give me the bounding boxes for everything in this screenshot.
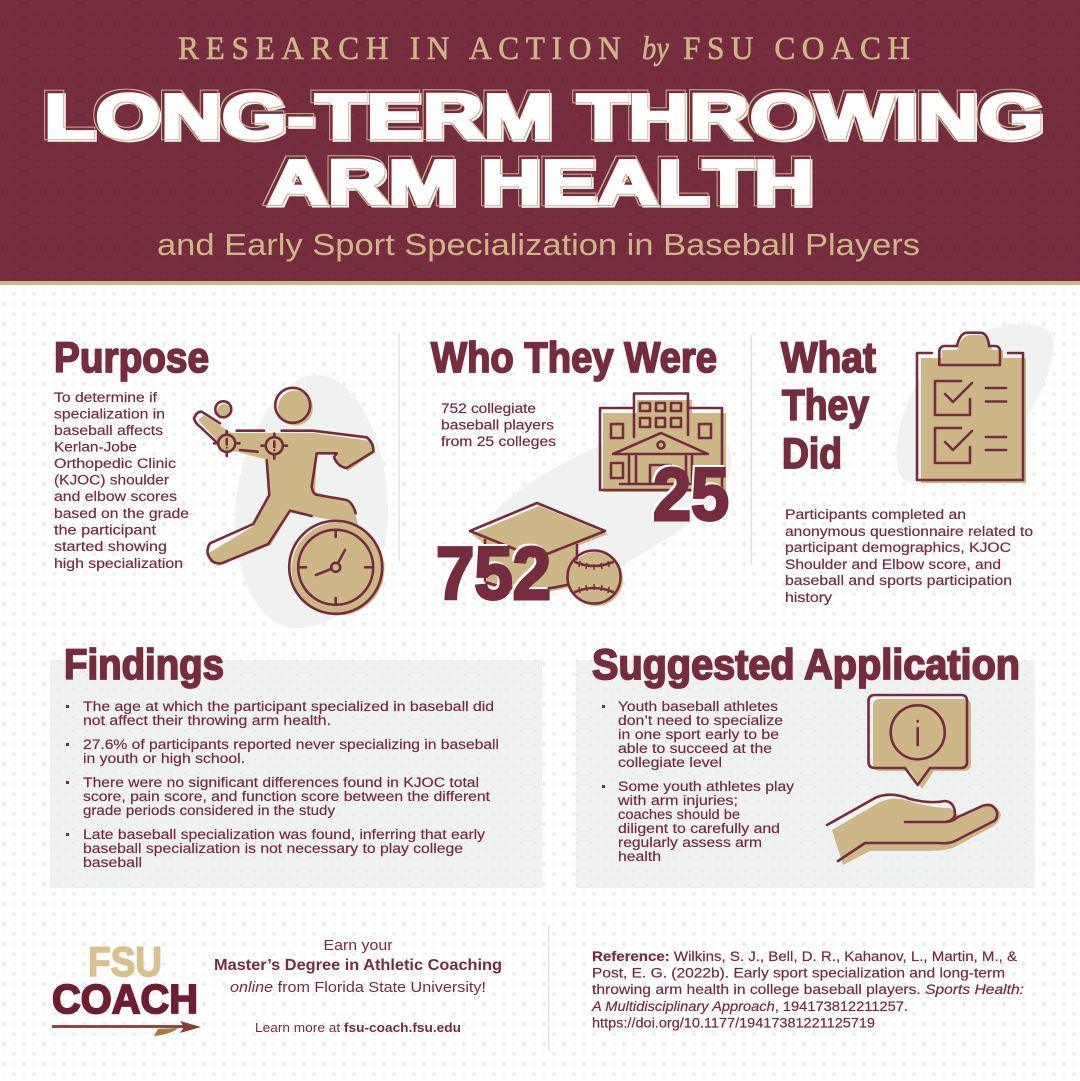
subtitle: and Early Sport Specialization in Baseball Players xyxy=(157,227,920,262)
heading: findings: Findings xyxy=(64,641,224,689)
purpose text: and elbow scores xyxy=(54,489,177,505)
title: LONG-TERM THROWING xyxy=(44,80,1044,152)
findings list: not affect their throwing arm health. xyxy=(83,713,331,729)
who they were text: 752 collegiate xyxy=(441,401,536,417)
what they did text: baseball and sports participation xyxy=(785,573,1012,589)
panel: purpose xyxy=(54,334,388,628)
application list: coaches should be xyxy=(618,807,740,823)
logo: FSU Coach xyxy=(52,938,201,1036)
purpose text: To determine if xyxy=(54,390,157,406)
findings list: 27.6% of participants reported never specializing in baseball xyxy=(83,737,499,753)
heading: purpose: Purpose xyxy=(54,334,209,382)
logo: FSU Coach: FSU xyxy=(88,938,162,985)
purpose text: (KJOC) shoulder xyxy=(54,472,169,488)
purpose text: specialization in xyxy=(54,406,165,422)
logo: FSU Coach: COACH xyxy=(52,976,198,1022)
findings list: score, pain score, and function score between the different xyxy=(83,789,490,805)
icon: info bubble over open hand xyxy=(827,695,1001,865)
purpose text: started showing xyxy=(54,539,167,555)
heading: what they did: What xyxy=(781,334,876,382)
icon: baseball xyxy=(568,550,623,606)
promo text xyxy=(214,938,502,1035)
reference: https://doi.org/10.1177/19417381221125719 xyxy=(592,1016,875,1032)
what they did text: history xyxy=(785,590,833,606)
purpose text: based on the grade xyxy=(54,506,189,522)
reference: Reference: Wilkins, S. J., Bell, D. R., Kahanov, L., Martin, M., & xyxy=(592,949,1018,965)
promo text: Learn more at fsu-coach.fsu.edu xyxy=(255,1020,461,1035)
reference xyxy=(591,949,1024,1032)
purpose text: baseball affects xyxy=(54,423,163,439)
reference: Post, E. G. (2022b). Early sport specialization and long-term xyxy=(592,966,1005,982)
what they did text: Participants completed an xyxy=(785,507,966,523)
findings list: There were no significant differences found in KJOC total xyxy=(83,775,479,791)
icon: clipboard checklist xyxy=(917,333,1026,483)
header banner xyxy=(0,0,1080,285)
purpose text: high specialization xyxy=(54,556,183,572)
application list: Some youth athletes play xyxy=(618,779,795,795)
application list: able to succeed at the xyxy=(618,741,772,757)
reference: throwing arm health in college baseball players. Sports Health: xyxy=(592,982,1024,998)
promo text: Master’s Degree in Athletic Coaching xyxy=(214,957,502,974)
findings list: baseball specialization is not necessary to play college xyxy=(83,841,463,857)
application list: health xyxy=(618,849,661,865)
number: 752 players: 752 xyxy=(436,532,551,615)
eyebrow: research in action xyxy=(178,29,910,67)
heading: what they did: They xyxy=(782,382,869,430)
application list: don’t need to specialize xyxy=(618,713,783,729)
findings list: grade periods considered in the study xyxy=(83,803,336,819)
promo text: online from Florida State University! xyxy=(230,980,486,996)
eyebrow: research in action: by xyxy=(642,31,669,67)
heading: suggested application: Suggested Application xyxy=(592,641,1020,689)
heading: who they were: Who They Were xyxy=(431,334,717,382)
purpose text: Kerlan-Jobe xyxy=(54,440,137,456)
panel: what they did xyxy=(781,324,1053,606)
reference: A Multidisciplinary Approach , 194173812211257. xyxy=(591,999,908,1015)
what they did text: anonymous questionnaire related to xyxy=(785,524,1033,540)
what they did text: participant demographics, KJOC xyxy=(785,540,1011,556)
purpose text xyxy=(54,390,189,572)
application list: regularly assess arm xyxy=(618,835,762,851)
who they were text: from 25 colleges xyxy=(441,434,556,450)
findings list: baseball xyxy=(83,855,142,871)
number: 25 colleges: 25 xyxy=(653,453,729,536)
eyebrow: research in action: RESEARCH IN ACTION xyxy=(178,29,621,66)
background blob xyxy=(897,324,1053,485)
panel: who they were xyxy=(431,334,731,615)
findings list: Late baseball specialization was found, inferring that early xyxy=(83,827,486,843)
who they were text xyxy=(441,401,556,450)
who they were text: baseball players xyxy=(441,418,554,434)
application list: in one sport early to be xyxy=(618,727,779,743)
heading: what they did xyxy=(781,334,876,478)
icon: injured pitcher with clock xyxy=(194,375,388,628)
title xyxy=(44,80,1044,218)
background blob xyxy=(488,424,731,581)
application list xyxy=(602,699,795,865)
what they did text xyxy=(785,507,1033,606)
findings list xyxy=(66,699,499,871)
findings list: The age at which the participant specialized in baseball did xyxy=(83,699,494,715)
icon: college building xyxy=(600,394,726,492)
application list: Youth baseball athletes xyxy=(618,699,778,715)
title: ARM HEALTH xyxy=(267,146,814,218)
heading: what they did: Did xyxy=(782,430,842,478)
application list: with arm injuries; xyxy=(617,793,738,809)
findings list: in youth or high school. xyxy=(83,751,245,767)
what they did text: Shoulder and Elbow score, and xyxy=(785,557,1001,573)
application list: diligent to carefully and xyxy=(618,821,780,837)
eyebrow: research in action: FSU COACH xyxy=(683,29,910,66)
purpose text: Orthopedic Clinic xyxy=(54,456,176,472)
panel: footer promo xyxy=(52,938,502,1036)
panel: findings xyxy=(50,641,542,888)
panel: suggested application xyxy=(576,641,1035,888)
purpose text: the participant xyxy=(54,522,156,538)
application list: collegiate level xyxy=(618,755,722,771)
promo text: Earn your xyxy=(324,938,393,954)
icon: graduation cap xyxy=(470,503,608,592)
